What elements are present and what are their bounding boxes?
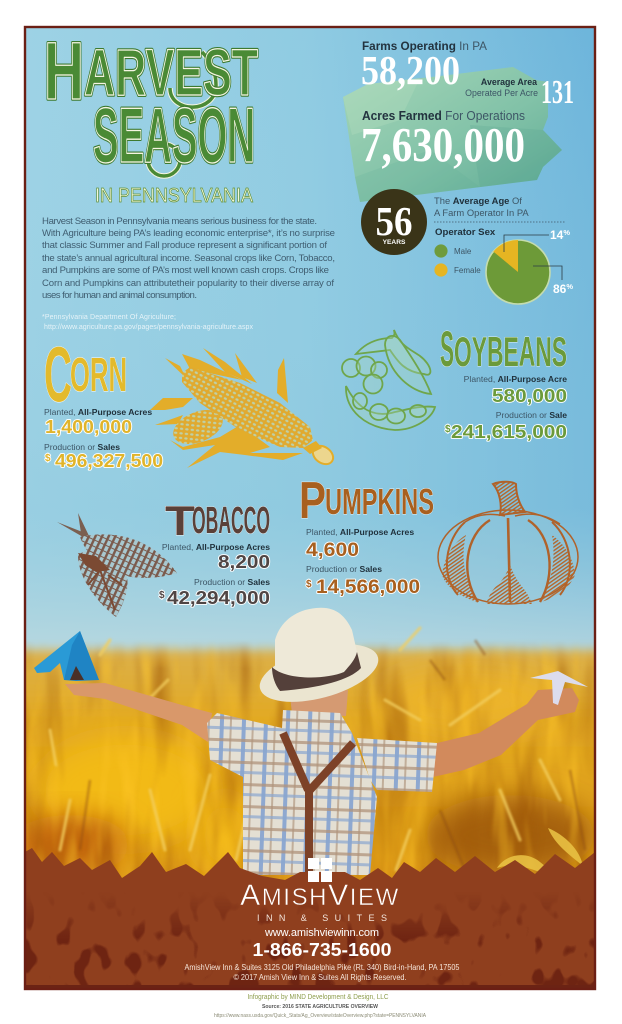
- title word: harvest: H: [44, 26, 84, 117]
- corn tip: [309, 442, 337, 468]
- corn heading: ORN: [70, 349, 127, 402]
- soybeans heading: S: [440, 321, 454, 377]
- panel: pumpkins: [299, 472, 578, 604]
- left sleeve: [207, 713, 282, 777]
- corn stats: $: [45, 453, 51, 464]
- suspenders: [283, 733, 353, 875]
- corn stats: Production or Sales: [44, 442, 120, 452]
- 86 percent: 86: [553, 282, 566, 296]
- soybeans stats: $: [445, 424, 451, 435]
- average area label: Operated Per Acre: [465, 88, 538, 98]
- soybeans stats: 580,000: [492, 385, 567, 406]
- intro paragraph: and Pumpkins are some of PA’s most well known cash crops. Crops like: [42, 265, 329, 276]
- tobacco stats: $: [159, 590, 165, 601]
- panel: tobacco: [57, 497, 270, 617]
- pumpkins stats: $: [306, 579, 312, 590]
- tobacco stats: 42,294,000: [167, 587, 270, 608]
- age badge: YEARS: [383, 239, 406, 246]
- icon: soybeans: [342, 330, 435, 430]
- title word: harvest: [46, 41, 259, 110]
- soybeans heading: [440, 321, 567, 377]
- panel: pennsylvania map: [343, 67, 562, 202]
- pumpkins stats: [306, 527, 420, 598]
- right sleeve: [357, 738, 437, 792]
- acres farmed label: Acres Farmed For Operations: [362, 109, 525, 123]
- corn stats: 1,400,000: [45, 417, 132, 437]
- soybeans stats: [445, 374, 567, 442]
- tobacco stats: [159, 542, 270, 608]
- neck: [290, 690, 348, 716]
- average area label: Average Area: [481, 77, 537, 87]
- pumpkins heading: UMPKINS: [325, 481, 434, 522]
- shirt body: [243, 710, 377, 875]
- panel: corn: [44, 330, 337, 471]
- hat: [260, 608, 378, 702]
- legend: operator sex: Operator Sex: [435, 227, 496, 238]
- 86 percent: %: [566, 282, 573, 291]
- icon: pumpkin: [438, 482, 578, 604]
- acres farmed number: 7,630,000: [361, 117, 525, 172]
- pumpkins heading: [299, 472, 434, 530]
- legend: operator sex: Male: [454, 247, 472, 256]
- corn stats: Planted, All-Purpose Acres: [44, 407, 152, 417]
- title: harvest season: [46, 41, 259, 202]
- intro paragraph: Harvest Season in Pennsylvania means serious business for the state.: [42, 216, 317, 227]
- intro paragraph: that classic Summer and Fall produce represent a significant portion of: [42, 240, 327, 251]
- copyright: © 2017 Amish View Inn & Suites All Rights Reserved.: [234, 973, 406, 982]
- intro paragraph: [42, 216, 335, 301]
- leader line: [533, 266, 562, 280]
- 14 percent: 14: [550, 228, 563, 242]
- intro paragraph: the state’s annual agricultural income. Seasonal crops like Corn, Tobacco,: [42, 253, 335, 264]
- footnote: http://www.agriculture.pa.gov/pages/pennsylvania-agriculture.aspx: [44, 324, 254, 331]
- husk leaves: [165, 348, 288, 403]
- soybeans stats: Production or Sale: [496, 410, 567, 420]
- left arm: [65, 683, 212, 742]
- main cob: [182, 367, 313, 448]
- average area number: 131: [541, 74, 574, 111]
- tobacco stats: Production or Sales: [194, 577, 270, 587]
- icon: corn: [150, 348, 337, 468]
- pie chart: operator sex: [486, 228, 573, 304]
- corn heading: C: [44, 330, 72, 418]
- soybeans stats: 241,615,000: [451, 421, 567, 442]
- panel: framed poster area: OBACCO: [192, 500, 270, 542]
- foreground silhouette: [25, 845, 595, 991]
- intro paragraph: uses for human and animal consumption.: [42, 290, 197, 301]
- website: www.amishviewinn.com: [264, 927, 379, 939]
- pumpkins stats: Production or Sales: [306, 564, 382, 574]
- credits: [214, 994, 427, 1019]
- pumpkins stats: 14,566,000: [316, 577, 420, 598]
- age description: [434, 195, 529, 218]
- pumpkins stats: Planted, All-Purpose Acres: [306, 527, 414, 537]
- title: harvest season: SEASON: [93, 91, 255, 179]
- 14 percent: %: [563, 228, 570, 237]
- wheat ear: [497, 828, 582, 872]
- legend: operator sex: [434, 227, 496, 277]
- pumpkins heading: P: [299, 472, 326, 530]
- title: harvest season: SEASON: [93, 91, 255, 179]
- tobacco stats: 8,200: [218, 551, 270, 572]
- farms operating number: 58,200: [361, 47, 460, 93]
- address: AmishView Inn & Suites 3125 Old Philadelphia Pike (Rt. 340) Bird-in-Hand, PA 17505: [184, 963, 460, 972]
- footnote: *Pennsylvania Department Of Agriculture;: [42, 314, 176, 321]
- soybeans stats: Planted, All-Purpose Acre: [464, 374, 567, 384]
- tobacco heading: [165, 497, 270, 544]
- age description: A Farm Operator In PA: [434, 207, 529, 218]
- age badge: [361, 189, 427, 255]
- footnote: [42, 314, 254, 331]
- phone number: 1-866-735-1600: [252, 940, 392, 960]
- intro paragraph: Corn and Pumpkins can attributetheir popularity to their diverse array of: [42, 278, 334, 289]
- photo: wheat field: [26, 625, 594, 880]
- corn stats: 496,327,500: [55, 451, 163, 471]
- icon: blue paper plane: [34, 631, 99, 681]
- tobacco stats: Planted, All-Purpose Acres: [162, 542, 270, 552]
- panel: logo and contact: [184, 858, 460, 982]
- corn heading: [44, 330, 127, 418]
- farms operating label: Farms Operating In PA: [362, 39, 487, 53]
- leader line: [504, 235, 549, 252]
- credit line: Infographic by MIND Development & Design, LLC: [248, 994, 388, 1001]
- stats: farms: [361, 39, 574, 172]
- panel: soybeans: [342, 321, 567, 442]
- age badge: 56: [376, 198, 412, 244]
- title word: harvest: H: [44, 26, 84, 117]
- title word: harvest: ARVEST: [84, 35, 258, 109]
- background: sky: [25, 27, 595, 667]
- title word: harvest: ARVEST: [84, 35, 258, 109]
- logo wordmark: AMISHVIEW: [240, 879, 400, 912]
- age description: The Average Age Of: [434, 195, 522, 206]
- source url: https://www.nass.usda.gov/Quick_Stats/Ag_Overview/stateOverview.php?state=PENNSYLVANIA: [214, 1013, 427, 1019]
- title word: season: [93, 106, 254, 179]
- icon: tobacco leaves: [57, 513, 177, 617]
- tobacco heading: T: [165, 497, 195, 544]
- right arm: [433, 688, 579, 777]
- average area label: [465, 77, 538, 98]
- source line: Source: 2016 STATE AGRICULTURE OVERVIEW: [262, 1004, 379, 1010]
- icon: logo window: [308, 858, 332, 882]
- icon: white paper plane: [530, 671, 588, 705]
- boy figure: [65, 608, 579, 875]
- pumpkins stats: 4,600: [306, 540, 359, 561]
- legend: operator sex: Female: [454, 266, 481, 275]
- intro paragraph: With Agriculture being PA’s leading economic enterprise*, it’s no surprise: [42, 228, 335, 239]
- lower cob: [168, 403, 228, 451]
- corn stats: [44, 407, 163, 471]
- logo subtitle: INN & SUITES: [257, 913, 387, 923]
- subtitle: IN PENNSYLVANIA: [95, 185, 254, 207]
- lower husks: [170, 425, 303, 468]
